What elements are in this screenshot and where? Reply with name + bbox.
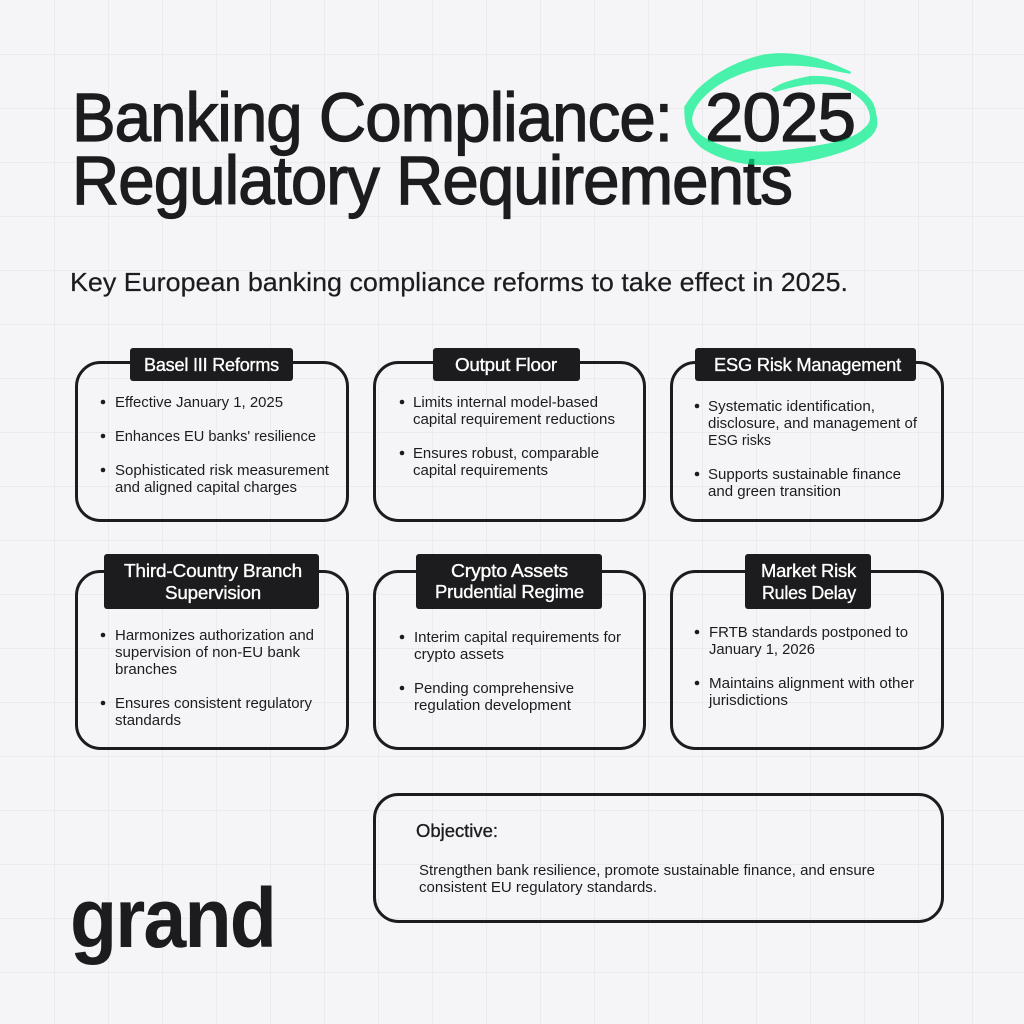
bullet list: Interim capital requirements for (414, 629, 621, 646)
bullet list (695, 398, 918, 500)
icon: green marker circle around 2025 (684, 53, 877, 165)
heading: Crypto Assets Prudential Regime: Crypto Assets (451, 560, 568, 581)
bullet list (101, 394, 330, 496)
bullet list: Harmonizes authorization and (115, 627, 314, 644)
title: Regulatory Requirements (72, 142, 792, 219)
panel: Basel III Reforms (76, 348, 348, 520)
bullet list: capital requirement reductions (413, 411, 615, 428)
bullet list: regulation development (414, 697, 572, 714)
objective text (419, 862, 875, 896)
objective text: Strengthen bank resilience, promote sustainable finance, and ensure (419, 862, 875, 879)
bullet list: Pending comprehensive (414, 680, 574, 697)
panel: ESG Risk Management (672, 348, 942, 520)
bullet list: Ensures robust, comparable (413, 445, 599, 462)
heading: Basel III Reforms: Basel III Reforms (144, 354, 279, 375)
bullet list: Sophisticated risk measurement (115, 462, 330, 479)
heading: Crypto Assets Prudential Regime: Prudential Regime (435, 581, 584, 602)
heading: ESG Risk Management (695, 348, 916, 381)
title: Banking Compliance: (72, 79, 672, 156)
bullet list (400, 394, 615, 479)
heading: Crypto Assets Prudential Regime (416, 554, 602, 609)
bullet list: crypto assets (414, 646, 504, 663)
bullet list (695, 624, 914, 709)
panel: Market Risk Rules Delay (672, 554, 942, 748)
bullet list: January 1, 2026 (709, 641, 815, 658)
bullet list: supervision of non-EU bank (115, 644, 300, 661)
bullet list: disclosure, and management of (708, 415, 918, 432)
title: 2025 (705, 79, 855, 156)
bullet list: ESG risks (708, 432, 771, 449)
bullet list: capital requirements (413, 462, 548, 479)
bullet list: branches (115, 661, 177, 678)
bullet list: FRTB standards postponed to (709, 624, 908, 641)
objective text: consistent EU regulatory standards. (419, 879, 657, 896)
panel: Third-Country Branch Supervision (76, 554, 348, 748)
bullet list: jurisdictions (708, 692, 788, 709)
bullet list (101, 627, 314, 729)
bullet list: Ensures consistent regulatory (115, 695, 312, 712)
bullet list (400, 629, 621, 714)
heading: Output Floor: Output Floor (455, 354, 557, 375)
heading: Market Risk Rules Delay: Rules Delay (762, 582, 857, 603)
bullet list: Enhances EU banks' resilience (115, 428, 316, 445)
bullet list: Effective January 1, 2025 (115, 394, 283, 411)
heading: Market Risk Rules Delay (745, 554, 871, 609)
heading: Output Floor (433, 348, 580, 381)
bullet list: Limits internal model-based (413, 394, 598, 411)
panel: Crypto Assets Prudential Regime (374, 554, 644, 748)
heading: Third-Country Branch Supervision (104, 554, 319, 609)
heading: Market Risk Rules Delay: Market Risk (761, 560, 857, 581)
heading: Third-Country Branch Supervision: Third-Country Branch (124, 560, 302, 581)
heading: Third-Country Branch Supervision: Supervision (165, 582, 261, 603)
panel: Objective (374, 794, 942, 922)
bullet list: Supports sustainable finance (708, 466, 901, 483)
bullet list: and aligned capital charges (115, 479, 297, 496)
heading: Basel III Reforms (130, 348, 293, 381)
heading: Objective: Objective: (416, 820, 498, 841)
subtitle: Key European banking compliance reforms to take effect in 2025. (70, 267, 848, 297)
bullet list: Systematic identification, (708, 398, 875, 415)
bullet list: standards (115, 712, 181, 729)
bullet list: Maintains alignment with other (709, 675, 914, 692)
logo: grand: grand (70, 871, 275, 965)
title (72, 79, 855, 219)
panel: Output Floor (374, 348, 644, 520)
heading: ESG Risk Management: ESG Risk Management (714, 354, 901, 375)
bullet list: and green transition (708, 483, 841, 500)
